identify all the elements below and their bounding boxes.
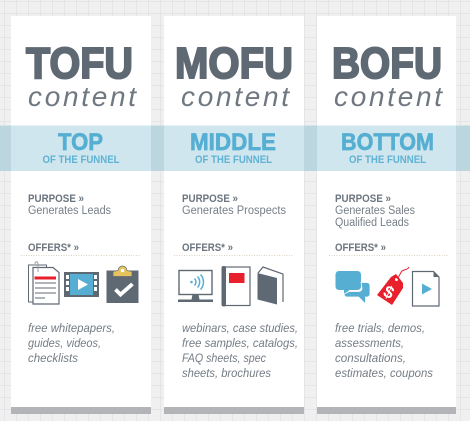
icon: catalog with red label (222, 266, 250, 306)
stage label: top of the funnel: TOP (58, 129, 103, 156)
heading: MOFU: MOFU (175, 39, 293, 88)
offer list: MOFU (182, 321, 298, 380)
heading: BOFU: BOFU (332, 39, 442, 88)
stage label: top of the funnel: OF THE FUNNEL (42, 154, 120, 166)
offer list: BOFU: estimates, coupons (335, 366, 433, 380)
offer list: TOFU: guides, videos, (28, 336, 101, 350)
purpose: MOFU: PURPOSE » (182, 193, 238, 205)
stage label: bottom of the funnel: OF THE FUNNEL (349, 154, 426, 166)
purpose: BOFU: Generates Sales (335, 205, 415, 217)
funnel stage band (0, 126, 470, 171)
offers heading: TOFU: OFFERS* » (28, 242, 79, 254)
offer list: TOFU: checklists (28, 351, 78, 365)
offer list: MOFU: sheets, brochures (182, 366, 271, 380)
icon: clipboard checklist (106, 266, 138, 303)
offers heading: MOFU (174, 242, 294, 256)
offer list: BOFU: free trials, demos, (335, 321, 425, 335)
offer list: BOFU: consultations, (335, 351, 406, 365)
offers heading: BOFU: OFFERS* » (335, 242, 386, 254)
panel: TOFU (11, 16, 151, 407)
subheading: MOFU content: content (181, 81, 290, 112)
offers heading: MOFU: OFFERS* » (182, 242, 233, 254)
stage label: bottom of the funnel (341, 129, 434, 166)
offers heading: TOFU (21, 242, 141, 256)
stage label: middle of the funnel: MIDDLE (190, 129, 276, 156)
subheading: BOFU content: content (334, 81, 443, 112)
offers heading: BOFU (329, 242, 448, 256)
purpose: MOFU: Generates Prospects (182, 205, 286, 217)
stage label: middle of the funnel: OF THE FUNNEL (195, 154, 272, 166)
purpose: MOFU (182, 193, 286, 217)
subheading: TOFU content: content (28, 81, 137, 112)
offer list: BOFU (335, 321, 433, 380)
purpose: BOFU (335, 193, 415, 229)
offer list: TOFU: free whitepapers, (28, 321, 115, 335)
purpose: BOFU: Qualified Leads (335, 217, 409, 229)
panel: MOFU (164, 16, 304, 407)
offer list: BOFU: assessments, (335, 336, 404, 350)
offer list: MOFU: FAQ sheets, spec (182, 351, 266, 365)
icon: red price tag: $ (380, 282, 398, 303)
heading: TOFU: TOFU (26, 39, 133, 88)
offer list: MOFU: free samples, catalogs, (182, 336, 298, 350)
icon: webinar monitor (178, 270, 213, 302)
icon: whitepaper document stack (28, 262, 59, 304)
panel: BOFU (317, 16, 456, 407)
stage label: top of the funnel (42, 129, 120, 166)
icon: closed book (258, 267, 283, 304)
stage label: bottom of the funnel: BOTTOM (341, 129, 434, 156)
offer list: MOFU: webinars, case studies, (182, 321, 298, 335)
offer list: TOFU (28, 321, 115, 365)
icon: red price tag (377, 267, 409, 305)
icon: video file (412, 272, 439, 306)
purpose: TOFU (28, 193, 111, 217)
purpose: TOFU: PURPOSE » (28, 193, 84, 205)
stage label: middle of the funnel (190, 129, 276, 166)
icon: chat bubbles (336, 271, 370, 304)
icon: video film strip (64, 272, 99, 297)
purpose: TOFU: Generates Leads (28, 205, 111, 217)
panel shadow bars (11, 407, 456, 414)
purpose: BOFU: PURPOSE » (335, 193, 391, 205)
